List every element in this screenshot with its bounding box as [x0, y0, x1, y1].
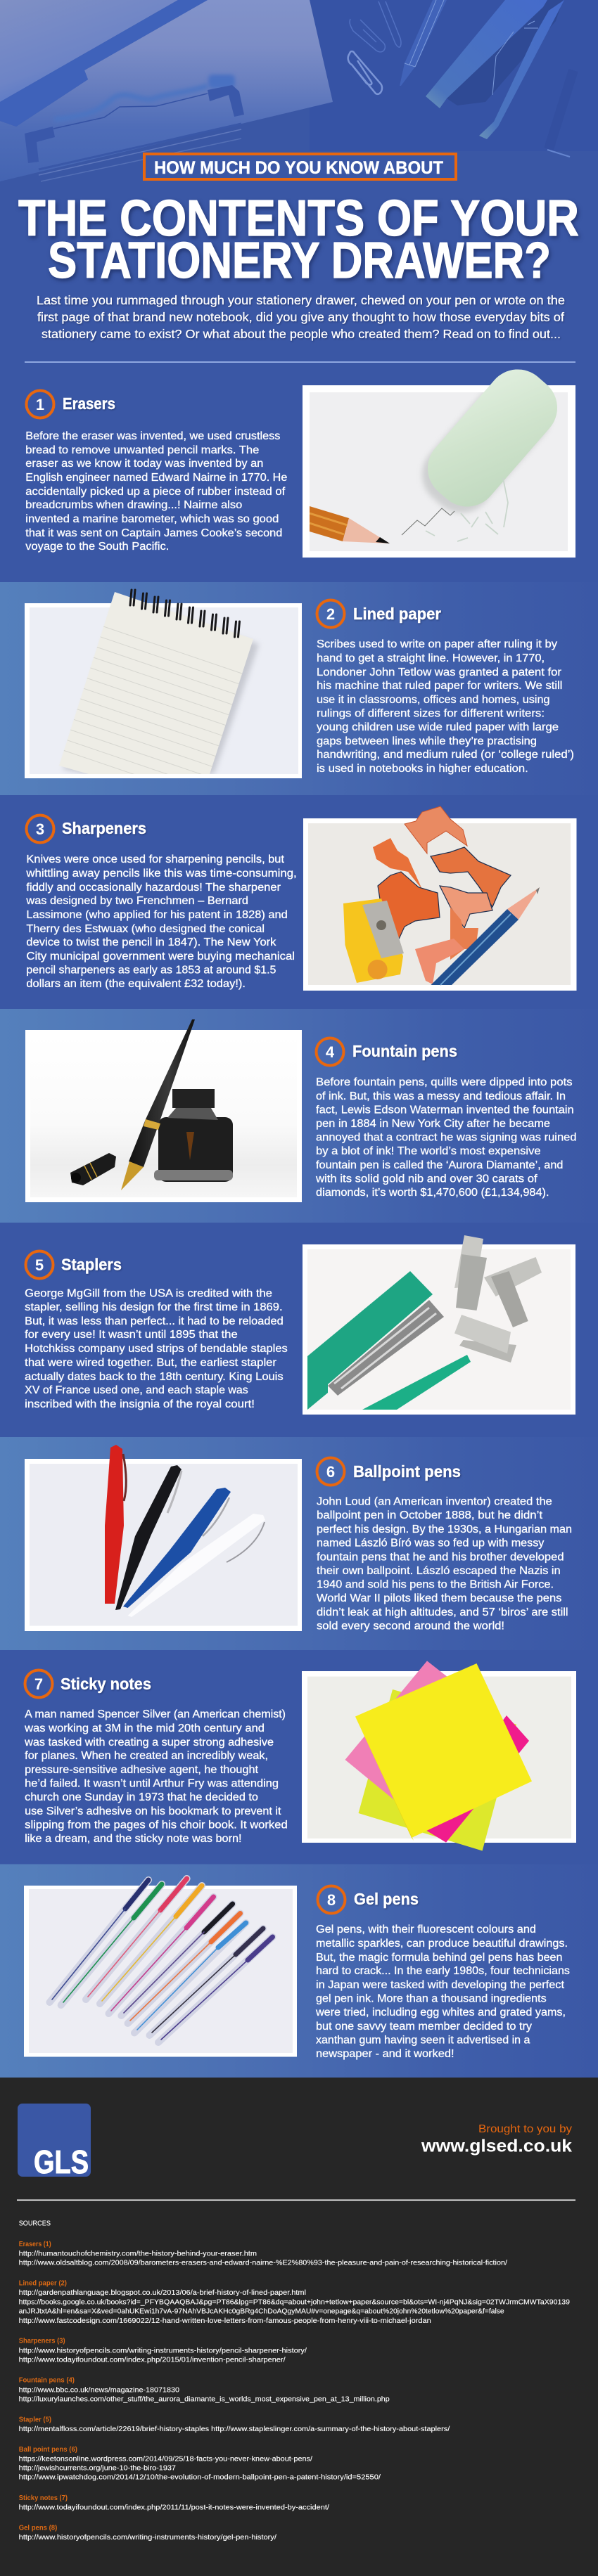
photo: spiral notepad	[25, 590, 302, 797]
text: gel pens	[315, 1924, 570, 2060]
text: ballpoint pens: named László Bíró was so fed up with messy	[317, 1538, 545, 1550]
text: gel pens: But, the magic formula behind gel pens has been	[316, 1952, 563, 1964]
sources list: Stapler (5)	[19, 2416, 51, 2423]
sources list: https://keetonsonline.wordpress.com/2014/09/25/18-facts-you-never-knew-about-pens/	[19, 2455, 312, 2463]
text: sharpeners: whittling away pencils like this was time-consuming,	[25, 868, 297, 880]
text: sticky notes: slipping from the pages of his choir book. It worked	[25, 1820, 288, 1831]
section background	[0, 1009, 598, 1223]
text: ballpoint pens: John Loud (an American inventor) created the	[317, 1496, 552, 1508]
text: staplers: inscribed with the insignia of the royal court!	[25, 1398, 255, 1410]
text: sharpeners: Therry des Estwuax (who designed the conical	[26, 923, 265, 935]
panel: gel pens	[0, 1865, 598, 2078]
brought to you by: Brought to you by	[478, 2123, 572, 2135]
text: gel pens: but one savvy team member decided to try	[316, 2021, 532, 2033]
text: lined paper: Londoner John Tetlow was granted a patent for	[317, 666, 561, 678]
sources list: Erasers (1)	[19, 2241, 51, 2248]
text: fountain pens: with its solid gold nib and over 30 carats of	[315, 1173, 537, 1185]
text: ballpoint pens: World War II pilots liked them because the pens	[317, 1592, 562, 1604]
text: staplers	[25, 1288, 288, 1410]
heading: lined paper: Lined paper	[353, 605, 441, 623]
text: staplers: actually dates back to the 18th century. King Louis	[25, 1371, 284, 1383]
text: sticky notes: like a dream, and the sticky note was born!	[25, 1833, 242, 1845]
text: ballpoint pens: fountain pens that he and his brother developed	[317, 1551, 564, 1564]
text: staplers: George MgGill from the USA is credited with the	[25, 1288, 272, 1299]
text: fountain pens: fountain pen is called the ‘Aurora Diamante’, and	[316, 1159, 563, 1171]
panel: fountain pens	[0, 1009, 598, 1223]
heading: sticky notes: Sticky notes	[61, 1675, 151, 1693]
text: sharpeners: dollars an item (the equivalent £32 today!).	[26, 978, 246, 990]
text: staplers: stapler, selling his design for the first time in 1869.	[25, 1301, 283, 1313]
logo: GLS	[18, 2104, 91, 2180]
sources list: http://mentalfloss.com/article/22619/brief-history-staples http://www.stapleslinger.com/a-summary-of-the-history-about-staplers/	[19, 2426, 450, 2433]
photo: gel pens	[24, 1879, 297, 2057]
section background	[0, 1437, 598, 1650]
number badge 5	[25, 1251, 53, 1278]
text: erasers: voyage to the South Pacific.	[25, 541, 169, 553]
text: sticky notes	[24, 1708, 288, 1845]
text: erasers: invented a marine barometer, which was so good	[25, 513, 279, 525]
number badge 6: 6	[326, 1463, 335, 1481]
number badge 6	[317, 1458, 345, 1485]
photo: pencil sharpener, shavings and pencil	[303, 806, 577, 991]
text: ballpoint pens: perfect his design. By the 1930s, a Hungarian man	[317, 1524, 572, 1535]
number badge 8: 8	[327, 1891, 336, 1909]
number badge 7	[25, 1670, 52, 1697]
text: erasers: Before the eraser was invented, we used crustless	[25, 430, 281, 442]
text: sticky notes: A man named Spencer Silver (an American chemist)	[25, 1708, 286, 1720]
number badge 2	[317, 600, 345, 627]
text: fountain pens: Before fountain pens, quills were dipped into pots	[316, 1076, 573, 1088]
text: erasers: English engineer named Edward Nairne in 1770. He	[25, 472, 287, 484]
sources list: Lined paper (2)	[19, 2280, 67, 2288]
text: fountain pens: by a blot of ink! The world’s most expensive	[316, 1145, 541, 1157]
panel: erasers	[25, 356, 575, 558]
text: sticky notes: pressure-sensitive adhesive agent, he thought	[25, 1764, 259, 1776]
text: fountain pens	[315, 1076, 577, 1199]
number badge 1: 1	[36, 396, 44, 413]
sources list: http://www.historyofpencils.com/writing-instruments-history/gel-pen-history/	[19, 2534, 276, 2542]
text: gel pens: xanthan gum having seen it advertised in a	[316, 2035, 530, 2046]
number badge 7: 7	[34, 1675, 43, 1693]
text: sharpeners: fiddly and occasionally hazardous! The sharpener	[26, 882, 281, 894]
text: erasers: eraser as we know it today was invented by an	[25, 458, 263, 470]
text: sticky notes: use Silver’s adhesive on his bookmark to prevent it	[25, 1805, 281, 1817]
text: gel pens: newspaper - and it worked!	[316, 2048, 454, 2060]
intro paragraph: stationery came to exist? Or what about the people who created them? Read on to find out...	[42, 327, 561, 341]
text: lined paper: young children use wide ruled paper with large	[317, 721, 559, 733]
text: ballpoint pens: 1940 and sold his pens to the British Air Force.	[317, 1579, 554, 1590]
text: sticky notes: church one Sunday in 1973 that he decided to	[25, 1791, 258, 1803]
sources list: http://www.oldsaltblog.com/2008/09/barometers-erasers-and-edward-nairne-%E2%80%93-the-pleasure-and-pain-of-researching-historical-fiction/	[19, 2260, 507, 2267]
text: sharpeners	[25, 854, 297, 990]
panel: lined paper	[0, 582, 598, 797]
number badge 5: 5	[35, 1256, 44, 1274]
photo: sticky notes	[302, 1661, 576, 1850]
section background	[0, 582, 598, 795]
brought to you by	[421, 2123, 572, 2156]
sources list: https://books.google.co.uk/books?id=_PFYBQAAQBAJ&pg=PT86&lpg=PT86&dq=about+john+tetlow+paper&source=bl&ots=WI-nj4PqNJ&sig=02TWJrmCMWTaX90139	[19, 2298, 570, 2306]
panel: staplers	[25, 1235, 575, 1415]
sources list: Gel pens (8)	[19, 2525, 57, 2532]
sources list: http://www.bbc.co.uk/news/magazine-18071830	[19, 2386, 179, 2394]
text: lined paper: gaps between lines while they’re practising	[317, 735, 537, 747]
text: gel pens: hard to crack... In the early 1980s, four technicians	[316, 1965, 570, 1977]
text: sharpeners: Lassimone (who applied for his patent in 1828) and	[26, 909, 288, 921]
text: sharpeners: Knives were once used for sharpening pencils, but	[26, 854, 285, 865]
footer	[0, 2078, 598, 2576]
text: erasers: accidentally picked up a piece of rubber instead of	[25, 486, 286, 498]
text: fountain pens: of ink. But, this was a messy and tedious affair. In	[316, 1090, 566, 1102]
intro paragraph: first page of that brand new notebook, did you give any thought to how those everyday bits of	[37, 310, 564, 324]
sources list: http://gardenpathlanguage.blogspot.co.uk/2013/06/a-brief-history-of-lined-paper.html	[19, 2289, 306, 2297]
text: lined paper: Scribes used to write on paper after ruling it by	[317, 638, 557, 650]
sources list: http://www.todayifoundout.com/index.php/2011/11/post-it-notes-were-invented-by-accident/	[19, 2504, 329, 2511]
number badge 2: 2	[326, 605, 335, 623]
title	[18, 191, 579, 289]
sources list: anJRJtxtA&hl=en&sa=X&ved=0ahUKEwi1h7vA-97NAhVBJcAKHc0gBRg4ChDoAQgyMAU#v=onepage&q=about%20john%20tetlow%20paper&f=false	[19, 2308, 504, 2316]
text: lined paper: his machine that ruled paper for writers. We still	[317, 680, 563, 692]
number badge 3: 3	[36, 820, 44, 838]
text: fountain pens: diamonds, it’s worth $1,470,600 (£1,134,984).	[316, 1187, 549, 1199]
sources list: Sharpeners (3)	[19, 2338, 65, 2345]
text: gel pens: gel pen ink. More than a thousand ingredients	[316, 1993, 547, 2005]
text: ballpoint pens: their own ballpoint. László escaped the Nazis in	[317, 1565, 561, 1577]
text: staplers: But, it was less than perfect... it had to be reloaded	[25, 1315, 284, 1327]
number badge 4: 4	[326, 1043, 335, 1061]
sources list: http://www.fastcodesign.com/1669022/12-hand-written-love-letters-from-famous-people-from-henry-viii-to-michael-jordan	[19, 2317, 431, 2325]
photo: eraser and pencil	[303, 356, 575, 558]
text: sticky notes: was tasked with creating a super strong adhesive	[24, 1737, 274, 1749]
text: staplers: Hotchkiss company used strips of bendable staples	[25, 1343, 288, 1355]
text: gel pens: Gel pens, with their fluorescent colours and	[316, 1924, 536, 1936]
text: sticky notes: for planes. When he created an incredibly weak,	[25, 1750, 268, 1762]
sources list: Ball point pens (6)	[19, 2446, 77, 2454]
intro paragraph	[37, 293, 565, 341]
text: sharpeners: City municipal government were buying mechanical	[26, 951, 295, 962]
text: erasers: breadcrumbs when drawing...! Nairne also	[25, 499, 242, 511]
number badge 8	[318, 1886, 345, 1914]
header tag: how much do you know about: HOW MUCH DO YOU KNOW ABOUT	[154, 158, 443, 178]
heading: fountain pens: Fountain pens	[352, 1042, 457, 1060]
text: lined paper	[317, 638, 574, 775]
heading: sharpeners: Sharpeners	[62, 819, 146, 837]
heading: erasers: Erasers	[63, 394, 115, 413]
text: sharpeners: device to twist the pencil in 1847). The New York	[26, 936, 276, 948]
logo: GLS: GLS	[34, 2144, 89, 2180]
text: ballpoint pens	[317, 1496, 572, 1632]
heading: ballpoint pens: Ballpoint pens	[353, 1462, 461, 1481]
panel: sharpeners	[25, 806, 577, 991]
text: gel pens: in Japan were tasked with developing the perfect	[316, 1979, 565, 1991]
sources list: Fountain pens (4)	[19, 2377, 75, 2385]
sources list: http://www.todayifoundout.com/index.php/2015/01/invention-pencil-sharpener/	[19, 2356, 286, 2364]
number badge 3	[27, 816, 53, 842]
text: sharpeners: was designed by two Frenchmen – Bernard	[25, 895, 248, 907]
sources list: SOURCES	[19, 2220, 51, 2228]
section background	[0, 1865, 598, 2078]
sources list: http://www.historyofpencils.com/writing-instruments-history/pencil-sharpener-history/	[19, 2348, 307, 2355]
number badge 4	[317, 1038, 343, 1066]
panel: ballpoint pens	[0, 1437, 598, 1650]
text: staplers: for every use! It wasn’t until 1895 that the	[25, 1329, 238, 1341]
text: erasers	[25, 430, 287, 553]
text: gel pens: metallic sparkles, can produce beautiful drawings.	[316, 1938, 568, 1950]
sources list: http://jewishcurrents.org/june-10-the-biro-1937	[19, 2464, 176, 2472]
text: lined paper: is used in notebooks in higher education.	[317, 763, 528, 775]
text: sticky notes: he’d failed. It wasn’t until Arthur Fry was attending	[25, 1777, 279, 1790]
photo: fountain pen and ink bottle	[25, 1019, 302, 1202]
text: ballpoint pens: sold every second around the world!	[317, 1620, 504, 1632]
number badge 1	[27, 391, 53, 418]
text: lined paper: use it in classrooms, offices and homes, using	[317, 694, 550, 706]
text: fountain pens: annoyed that a contract he was signing was ruined	[316, 1132, 577, 1143]
text: ballpoint pens: didn’t leak at high altitudes, and 57 ‘biros’ are still	[317, 1606, 568, 1618]
text: ballpoint pens: ballpoint pen in October 1888, but he didn’t	[317, 1509, 543, 1521]
intro paragraph: Last time you rummaged through your stationery drawer, chewed on your pen or wrote on the	[37, 293, 565, 307]
text: lined paper: hand to get a straight line. However, in 1770,	[317, 652, 545, 664]
photo: stapler and staples	[303, 1235, 575, 1415]
brought to you by: www.glsed.co.uk	[421, 2136, 572, 2156]
sources list: http://luxurylaunches.com/other_stuff/the_aurora_diamante_is_worlds_most_expensive_pen_at_13_million.php	[19, 2395, 390, 2403]
text: sharpeners: pencil sharpeners as early as 1853 at around $1.5	[26, 965, 276, 976]
photo: four ballpoint pens	[25, 1445, 302, 1631]
sources list: http://humantouchofchemistry.com/the-history-behind-your-eraser.htm	[19, 2250, 257, 2258]
text: staplers: that were wired together. But, the earliest stapler	[25, 1357, 276, 1369]
hero photo: clipboard, paperclips, pencil and stapler tinted blue	[0, 0, 598, 181]
text: lined paper: handwriting, and medium ruled (or ‘college ruled’)	[317, 749, 574, 761]
heading: gel pens: Gel pens	[354, 1890, 419, 1908]
text: staplers: XV of France used one, and each staple was	[25, 1384, 248, 1396]
sources list: http://www.ipwatchdog.com/2014/12/10/the-evolution-of-modern-ballpoint-pen-a-patent-history/id=52550/	[19, 2474, 381, 2482]
text: gel pens: were tried, including egg whites and grated yams,	[315, 2007, 566, 2018]
panel: sticky notes	[24, 1661, 576, 1850]
text: lined paper: rulings of different sizes for different writers:	[317, 707, 545, 720]
text: fountain pens: pen in 1884 in New York City after he became	[316, 1118, 550, 1130]
heading: staplers: Staplers	[61, 1256, 122, 1274]
text: erasers: bread to remove unwanted pencil marks. The	[25, 444, 259, 456]
sources list: Sticky notes (7)	[19, 2494, 68, 2502]
text: sticky notes: was working at 3M in the mid 20th century and	[24, 1722, 265, 1734]
sources list	[19, 2220, 570, 2542]
text: erasers: that it was sent on Captain James Cooke’s second	[25, 527, 282, 539]
text: fountain pens: fact, Lewis Edson Waterman invented the fountain	[316, 1104, 574, 1116]
